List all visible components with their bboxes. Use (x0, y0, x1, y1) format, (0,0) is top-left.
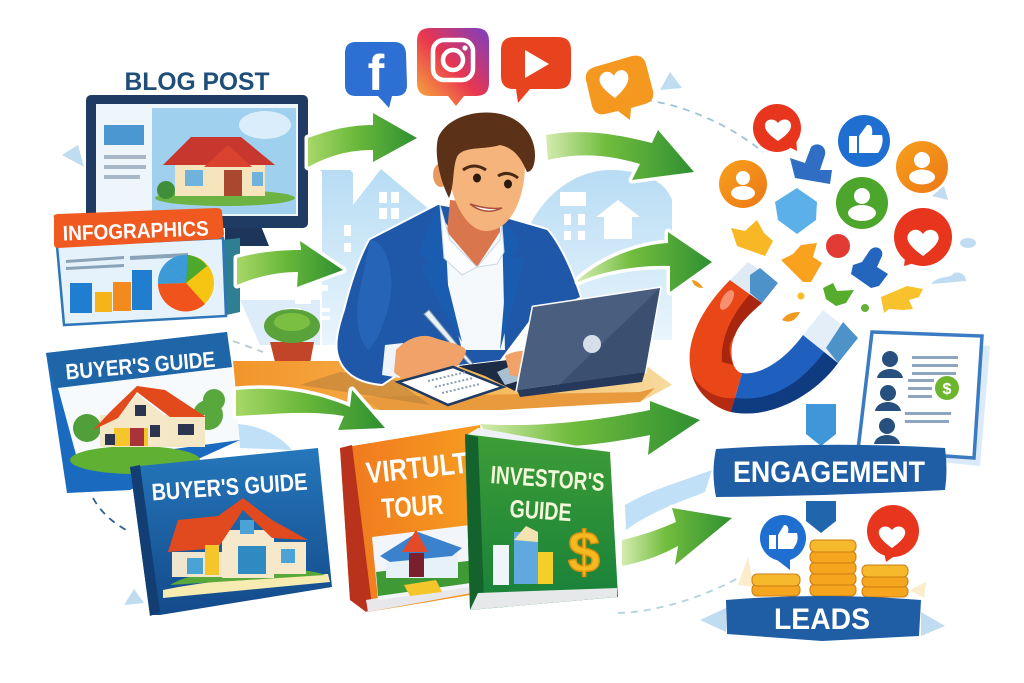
small shield connector (806, 501, 836, 533)
heading: investor's guide (490, 461, 605, 527)
shirt (440, 215, 505, 350)
cuff (382, 343, 403, 378)
house illustration (70, 386, 225, 474)
icon: person green (836, 177, 888, 229)
arrow: blog to author (308, 113, 417, 167)
house illustration (163, 498, 330, 598)
decorative shards (62, 72, 976, 636)
pale blue swooshes (238, 424, 712, 530)
heading: investor's guide: GUIDE (509, 495, 572, 527)
icon: thumbs up (790, 144, 832, 184)
pen (424, 310, 473, 366)
heading: virtual tour: TOUR (380, 489, 444, 524)
book: buyer's guide (130, 448, 332, 616)
engagement banner (714, 445, 946, 497)
arrow: books to leads (622, 508, 732, 566)
icon: heart bubble large (894, 208, 952, 266)
desk (233, 361, 672, 410)
leads banner (726, 596, 921, 641)
sparkles (692, 280, 869, 322)
ear (433, 163, 449, 187)
book: virtual tour (340, 425, 500, 612)
floating reaction icons (692, 104, 952, 322)
notebook (398, 367, 503, 405)
background city skyline (240, 169, 672, 345)
smile (470, 204, 502, 211)
heading: buyer's guide: BUYER'S GUIDE (65, 347, 216, 385)
arrow: author to magnet (578, 232, 712, 292)
heading: buyer's guide cover: BUYER'S GUIDE (151, 469, 308, 506)
laptop (458, 288, 660, 397)
arrow: books to magnet (480, 401, 700, 455)
heading: engagement: ENGAGEMENT (733, 456, 925, 489)
icon: envelope gem (775, 188, 817, 234)
sparkle patches (738, 557, 926, 598)
icon: video play (501, 37, 571, 103)
face (448, 137, 525, 231)
infographics panel (54, 208, 240, 325)
blog post monitor (86, 95, 308, 246)
buyer's guide card (46, 332, 240, 493)
arrow: guide to desk (236, 389, 385, 430)
heading: investor's guide: INVESTOR'S (490, 461, 605, 497)
eyes (473, 174, 481, 182)
icon: heart bubble (753, 104, 801, 152)
dollar badge (935, 376, 959, 400)
heading: virtual tour: VIRTULT (365, 447, 469, 490)
hair (437, 112, 535, 198)
arrow: infographics to author (237, 241, 343, 287)
icon: heart bubble (867, 505, 919, 562)
title: blog post: BLOG POST (124, 68, 270, 96)
lead form clipboard (858, 332, 990, 466)
icon: green thumb (823, 283, 854, 306)
heading: virtual tour (365, 447, 469, 524)
hand (394, 336, 466, 380)
lead magnet (690, 262, 858, 414)
icon: yellow hand (881, 286, 923, 313)
shield marker behind banner (806, 404, 836, 446)
lapels (418, 205, 462, 342)
neck (447, 200, 500, 267)
heading: leads: LEADS (774, 603, 870, 636)
icon: heart bubble (586, 56, 653, 120)
bar chart (70, 270, 152, 313)
social icons row (345, 28, 653, 120)
house illustration (372, 525, 478, 600)
icon: gold crown piece (731, 220, 773, 256)
icon: person (896, 141, 948, 193)
heading: infographics: INFOGRAPHICS (62, 217, 209, 246)
leads coins and reactions (738, 505, 926, 598)
book: investor's guide (465, 428, 618, 610)
potted plant (264, 309, 320, 374)
pie chart (158, 255, 214, 311)
icon: buildings (493, 526, 553, 585)
lead form clipboard: $ (943, 381, 952, 398)
icon: dollar coin: $ (568, 520, 600, 585)
icon: person (719, 160, 767, 208)
icon: blue thumb (851, 247, 888, 288)
collar (440, 205, 504, 275)
icon: thumbs up bubble (760, 515, 806, 570)
author at laptop (337, 112, 580, 384)
dashed connector curves (93, 100, 763, 613)
icon: facebook (345, 42, 407, 108)
person rows (874, 351, 903, 444)
icon: thumbs up bubble (838, 115, 890, 167)
jacket (337, 205, 580, 384)
arrow: author to engagement top (546, 130, 694, 180)
icon: facebook: f (368, 45, 385, 101)
icon: instagram (417, 28, 489, 106)
icon: gold thumb piece (781, 243, 822, 282)
coin stacks (752, 540, 908, 597)
icon: red dot (826, 234, 850, 258)
